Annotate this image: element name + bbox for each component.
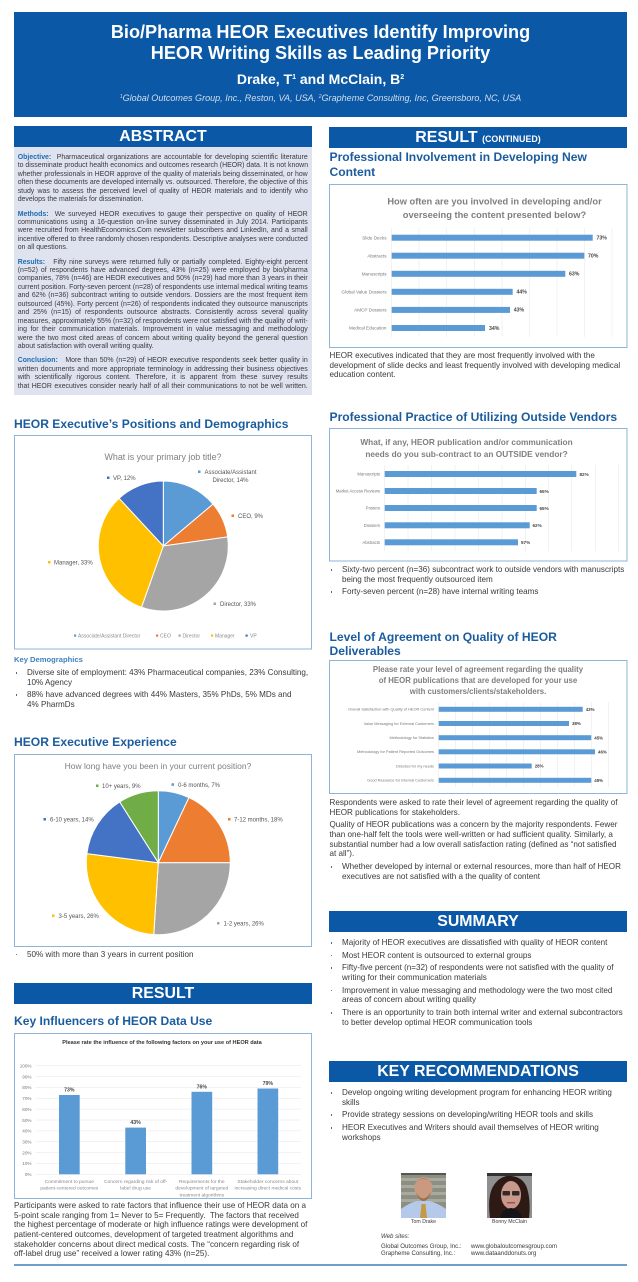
chart: agreement bars: Good Resource for Internal Customers — [367, 778, 434, 783]
chart: agreement bars: 38% — [572, 721, 581, 726]
chart: involvement bars: 73% — [596, 236, 607, 242]
text: influencers description: off-label drug use” received a lower rating 43% (n=25). — [14, 1249, 209, 1258]
panel: abstract text: develops the materials for dissemination. — [18, 196, 143, 203]
heading: summary — [329, 910, 627, 932]
panel: abstract text: outsourced (45%). Forty percent (n=26) of respondents indicated they outsource manuscripts — [18, 301, 308, 308]
panel: abstract text: Objective: Pharmaceutical organizations are accountable for developing scientific literature — [18, 154, 308, 161]
chart: influence column chart: 0% — [25, 1172, 32, 1177]
text: involvement description: education content. — [330, 370, 396, 379]
chart: experience pie — [14, 754, 312, 947]
text: influencers description: patient-centered outcomes, development of targeted treatment algorithms and — [14, 1230, 293, 1239]
chart: job title pie: Associate/Assistant — [204, 470, 257, 476]
list: summary points — [331, 938, 623, 1027]
chart: involvement bars: Manuscripts — [362, 272, 387, 276]
chart: involvement bars: 63% — [569, 272, 580, 278]
header banner — [14, 12, 627, 116]
chart: involvement bars: AMCP Dossiers — [354, 308, 387, 313]
text: influencers description: stakeholder concerns about direct medical costs. The “concern regarding risk of — [14, 1240, 299, 1249]
list: summary points: writing for their communication materials — [342, 973, 487, 982]
chart: agreement bars: of HEOR publications that are developed for your use — [379, 676, 578, 685]
panel: abstract text: communications using a 16-question on-line survey disseminated in July 2014. Participants — [18, 219, 308, 226]
panel: abstract text: Methods: We surveyed HEOR executives to gauge their perspective on quality of HEOR — [18, 211, 308, 218]
chart: vendor bars: 57% — [521, 540, 530, 545]
heading: result continued: RESULT (CONTINUED) — [415, 128, 541, 146]
heading: key influencers: Key Influencers of HEOR Data Use — [14, 1014, 212, 1028]
caption: Bonny McClain: Bonny McClain — [492, 1218, 527, 1224]
chart: experience pie: 10+ years, 9% — [102, 784, 141, 790]
chart: experience pie: 6-10 years, 14% — [50, 818, 94, 824]
chart: agreement bars: Methodology for Statistics — [389, 735, 434, 740]
heading: summary: SUMMARY — [437, 912, 519, 930]
list: key demographics: 10% Agency — [27, 678, 72, 687]
title: Bio/Pharma HEOR Executives Identify Improving — [111, 22, 530, 42]
panel: abstract text: that HEOR executives consider nearly half of all their communications to not be well written. — [18, 383, 308, 390]
text: involvement description — [330, 351, 620, 379]
photo: Tom Drake — [401, 1173, 446, 1218]
chart: agreement bars: Please rate your level of agreement regarding the quality — [373, 665, 584, 674]
text: influencers description — [14, 1201, 308, 1258]
text: agreement description: Whether developed by internal or external resources, more than half of HEOR — [342, 862, 621, 871]
list: vendor findings: Forty-seven percent (n=28) have internal writing teams — [342, 587, 538, 596]
list: vendor findings: being the most frequently outsourced item — [342, 575, 493, 584]
chart: influence column chart: Please rate the influence of the following factors on your use of HEOR data — [62, 1040, 263, 1046]
text: involvement description: development of slide decks and least frequently involved with developing medical — [330, 361, 620, 370]
chart: vendor bars: 65% — [540, 489, 549, 494]
text: web sites: Web sites: — [381, 1232, 409, 1240]
chart: involvement bars: 70% — [588, 254, 599, 260]
list: key demographics — [16, 668, 308, 709]
chart: job title pie: Manager, 33% — [54, 560, 93, 566]
chart: influence column chart: 30% — [22, 1140, 32, 1144]
chart: vendor bars: 62% — [532, 523, 542, 528]
text: agreement description: substantial number had a low overall satisfaction rating (defined as “not satisfied — [330, 840, 617, 849]
chart: experience pie: 7-12 months, 18% — [234, 818, 283, 824]
heading: professional involvement: Content — [330, 165, 375, 179]
chart: influence column chart: increasing direct medical costs — [234, 1186, 302, 1192]
list: recommendations: workshops — [342, 1133, 381, 1142]
text: web sites: Global Outcomes Group, Inc.: — [381, 1243, 462, 1250]
panel: abstract text: on all questions. — [18, 244, 68, 251]
list: key demographics: 4% PharmDs — [27, 700, 75, 709]
chart: agreement bars: Methodology for Patient Reported Outcomes — [357, 749, 434, 754]
chart: influence column chart: Concern regarding risk of off- — [104, 1179, 168, 1185]
chart: agreement bars: 46% — [598, 750, 607, 754]
panel: abstract text: written documents and more appropriate terminology in addressing their business objectives — [18, 366, 308, 373]
list: recommendations: Provide strategy sessions on developing/writing HEOR tools and skills — [342, 1110, 593, 1119]
chart: influence column chart: 90% — [22, 1074, 32, 1079]
chart: agreement bars: Directed for my needs — [396, 763, 434, 768]
chart: influence column chart: 10% — [22, 1161, 32, 1166]
chart: agreement bars: 43% — [586, 707, 595, 712]
chart: agreement bars: Value Messaging for External Customers — [364, 721, 434, 726]
heading: result — [14, 982, 312, 1004]
chart: influence column chart: Commitment to pursue — [45, 1179, 94, 1185]
panel: abstract text: were the two most cited areas of concern about writing quality beyond the general question — [18, 335, 308, 342]
chart: agreement bars: 28% — [535, 764, 544, 769]
chart: vendor bars — [329, 428, 628, 562]
chart: vendor bars: 82% — [580, 472, 589, 477]
list: summary points: to better develop optimal HEOR communication tools — [342, 1018, 532, 1027]
list: key demographics: 88% have advanced degrees with 44% Masters, 35% PhDs, 5% MDs and — [27, 690, 292, 699]
panel: abstract text: Results: Fifty nine surveys were returned fully or partially completed. Eighty-eight percent — [18, 259, 308, 266]
text: agreement description — [330, 798, 621, 881]
text: influencers description: Participants were asked to rate factors that influence their use of HEOR data on a — [14, 1201, 306, 1210]
panel: abstract text: and 62% (n=36) subcontract writing to outside vendors. Dossiers are the most frequent item — [18, 292, 308, 299]
list: summary points: Most HEOR content is outsourced to external groups — [342, 951, 531, 960]
panel: abstract text: measures, approximately 55% (n=32) of respondents were not satisfied with the quality of writ- — [18, 318, 308, 325]
heading: abstract — [14, 126, 312, 147]
chart: vendor bars: 65% — [540, 506, 549, 511]
chart: job title pie: Director, 33% — [220, 602, 257, 608]
chart: influence column chart: treatment algorithms — [180, 1192, 225, 1198]
text: agreement description: HEOR publications for stakeholders. — [330, 808, 460, 817]
heading: level of agreement: Level of Agreement on Quality of HEOR — [330, 630, 557, 644]
list: recommendations: Develop ongoing writing development program for enhancing HEOR writing — [342, 1088, 612, 1097]
heading: level of agreement: Deliverables — [330, 644, 401, 658]
chart: influence column chart: patient-centered outcomes — [40, 1186, 99, 1192]
chart: agreement bars: Overall Satisfaction with Quality of HEOR Content — [348, 707, 435, 712]
chart: involvement bars: Global Value Dossiers — [341, 290, 387, 294]
chart: vendor bars: Manuscripts — [357, 472, 380, 476]
chart: influence column chart: 40% — [22, 1129, 32, 1134]
panel: abstract text: ing for their communication materials. Improvement in value messaging and methodology — [18, 326, 308, 333]
list: experience note: 50% with more than 3 years in current position — [27, 950, 193, 958]
text: influencers description: the highest percentage of moderate or high influence ratings were development of — [14, 1220, 307, 1229]
chart: involvement bars: How often are you involved in developing and/or — [387, 196, 602, 206]
chart: influence column chart — [14, 1033, 312, 1199]
chart: experience pie: 3-5 years, 26% — [58, 914, 100, 920]
panel: abstract text: (n=52) of respondents have advanced degrees, 43% (n=25) were employed by bio/pharma — [18, 267, 308, 274]
heading: outside vendors: Professional Practice of Utilizing Outside Vendors — [330, 410, 617, 424]
text: agreement description: at all”). — [330, 849, 354, 858]
chart: influence column chart: 70% — [22, 1096, 32, 1101]
text: agreement description: executives are not satisfied with a the quality of content — [342, 872, 540, 881]
chart: job title pie: VP — [250, 634, 257, 640]
heading: executive experience: HEOR Executive Experience — [14, 735, 177, 749]
chart: influence column chart: 73% — [64, 1088, 75, 1094]
list: recommendations — [331, 1088, 612, 1142]
chart: involvement bars: overseeing the content presented below? — [403, 210, 587, 220]
chart: influence column chart: 100% — [20, 1064, 32, 1068]
text: web sites — [381, 1232, 557, 1257]
chart: influence column chart: 76% — [197, 1084, 207, 1090]
chart: influence column chart: 43% — [130, 1120, 141, 1126]
chart: vendor bars: Posters — [366, 506, 380, 510]
text: agreement description: Respondents were asked to rate their level of agreement regarding the quality of — [330, 798, 617, 807]
list: vendor findings: Sixty-two percent (n=36) subcontract work to outside vendors with manuscripts — [342, 565, 624, 574]
heading: result: RESULT — [132, 984, 194, 1002]
chart: involvement bars: 34% — [489, 326, 500, 332]
panel: abstract text — [14, 147, 312, 395]
title — [111, 22, 530, 63]
chart: job title pie: CEO, 9% — [238, 514, 264, 520]
panel: abstract text: study was to assess the perceived level of quality of HEOR materials and to identify who — [18, 188, 308, 195]
heading: positions and demographics: HEOR Executive’s Positions and Demographics — [14, 416, 288, 430]
chart: influence column chart: 79% — [263, 1081, 273, 1087]
heading: key recommendations — [329, 1061, 627, 1082]
affiliations: 1Global Outcomes Group, Inc., Reston, VA, USA, 2Grapheme Consulting, Inc, Greensboro, NC, USA — [120, 93, 521, 103]
chart: vendor bars: needs do you sub-contract to an OUTSIDE vendor? — [365, 449, 568, 459]
heading: level of agreement — [330, 630, 557, 658]
chart: influence column chart: 80% — [22, 1085, 32, 1090]
chart: involvement bars: Slide Decks — [362, 235, 387, 240]
list: summary points: areas of concern about writing quality — [342, 995, 476, 1004]
chart: job title pie: Manager — [215, 634, 235, 640]
panel: abstract text: companies, 78% (n=46) are HEOR executives and 50% (n=29) had more than 3 years in their — [18, 275, 308, 282]
list: recommendations: skills — [342, 1098, 360, 1107]
chart: involvement bars: 44% — [516, 290, 527, 296]
chart: influence column chart: Requirements for the — [179, 1179, 225, 1185]
chart: vendor bars: Market Access Reviews — [336, 488, 380, 494]
text: involvement description: HEOR executives indicated that they are most frequently involved with the — [330, 351, 595, 360]
panel: abstract text: Conclusion: More than 50% (n=29) of HEOR executive respondents seek better quality in — [18, 357, 308, 364]
heading: professional involvement — [330, 150, 587, 179]
chart: influence column chart: 20% — [22, 1150, 32, 1155]
text: web sites: Grapheme Consulting, Inc.: — [381, 1250, 455, 1257]
chart: involvement bars: Medical Education — [349, 326, 387, 331]
panel: abstract text: current position. Forty-seven percent (n=28) of respondents use internal medical writing teams — [18, 284, 308, 291]
chart: vendor bars: Abstracts — [363, 540, 380, 545]
text: agreement description: Quality of HEOR publications was a concern by the majority respondents. Fewer — [330, 820, 617, 829]
heading: key demographics: Key Demographics — [14, 655, 83, 664]
text: web sites: www.globaloutcomesgroup.com — [471, 1243, 557, 1250]
panel: abstract text: to disseminate product health economics and outcomes research (HEOR) data. It is not known — [18, 162, 308, 169]
chart: experience pie: 0-6 months, 7% — [178, 783, 221, 789]
photo: Bonny McClain — [487, 1173, 532, 1218]
panel: abstract text: were recruited from HealthEconomics.Com newsletter subscribers and LinkedIn, and a small — [18, 227, 308, 234]
chart: vendor bars: Dossiers — [364, 523, 380, 528]
chart: involvement bars — [329, 184, 628, 348]
chart: experience pie: How long have you been in your current position? — [65, 761, 252, 771]
chart: job title pie — [14, 435, 312, 650]
heading: key recommendations: KEY RECOMMENDATIONS — [377, 1063, 579, 1080]
list: summary points: Improvement in value messaging and methodology were the two most cited — [342, 986, 612, 995]
panel: abstract text: whether professionals in HEOR approve of the quality of materials being disseminated, or how — [18, 171, 308, 178]
chart: job title pie: Director — [182, 634, 200, 640]
chart: agreement bars: 45% — [594, 778, 603, 783]
chart: agreement bars — [329, 660, 628, 794]
chart: job title pie: Associate/Assistant Director — [78, 634, 141, 640]
chart: agreement bars: 45% — [594, 735, 603, 740]
list: summary points: Majority of HEOR executives are dissatisfied with quality of HEOR content — [342, 938, 607, 947]
panel: abstract text: with scientifically rigorous content. Therefore, it is apparent from these survey results — [18, 374, 308, 381]
chart: influence column chart: 60% — [22, 1107, 32, 1112]
list: summary points: There is an opportunity to train both internal writer and external subcontractors — [342, 1008, 623, 1017]
panel: abstract text: often these documents are developed internally vs. outsourced. Therefore, the objective of this — [18, 179, 308, 186]
chart: influence column chart: Stakeholder concerns about — [237, 1179, 299, 1185]
list: vendor findings — [331, 565, 624, 596]
list: summary points: Fifty-five percent (n=32) of respondents were not satisfied with the quality of — [342, 963, 614, 972]
caption: Tom Drake: Tom Drake — [411, 1218, 436, 1224]
panel: abstract text: about satisfaction with overall writing quality. — [18, 343, 154, 350]
authors: Drake, T1 and McClain, B2 — [237, 71, 404, 87]
chart: influence column chart: label drug use — [120, 1186, 151, 1192]
text: web sites: www.dataanddonuts.org — [471, 1250, 536, 1257]
chart: job title pie: VP, 12% — [113, 476, 136, 482]
heading: abstract: ABSTRACT — [119, 128, 207, 145]
panel: abstract text: and 25% (n=15) of respondents outsource abstracts. Consistently across several quality — [18, 309, 308, 316]
title: HEOR Writing Skills as Leading Priority — [151, 43, 490, 63]
chart: involvement bars: 43% — [514, 308, 524, 314]
chart: job title pie: What is your primary job title? — [105, 452, 222, 462]
chart: experience pie: 1-2 years, 26% — [224, 922, 265, 928]
chart: job title pie: Director, 14% — [212, 478, 249, 484]
chart: vendor bars: What, if any, HEOR publication and/or communication — [360, 437, 573, 447]
heading: professional involvement: Professional Involvement in Developing New — [330, 150, 587, 164]
chart: agreement bars: with customers/clients/stakeholders. — [409, 687, 546, 696]
chart: influence column chart: development of targeted — [175, 1186, 228, 1192]
list: recommendations: HEOR Executives and Writers should avail themselves of HEOR writing — [342, 1123, 599, 1132]
chart: influence column chart: 50% — [22, 1118, 32, 1123]
text: agreement description: than one-half felt the tools were well-written or had sufficient quality. Similarly, a — [330, 830, 613, 839]
panel: abstract text: incentive offered to three randomly chosen respondents. Descriptive analyses were conducted — [18, 236, 308, 243]
text: influencers description: 5-point scale ranging from 1= Never to 5= Frequently. The factors that received — [14, 1211, 299, 1220]
chart: involvement bars: Abstracts — [367, 253, 387, 258]
chart: job title pie: CEO — [160, 634, 171, 640]
heading: result continued — [329, 126, 627, 148]
list: key demographics: Diverse site of employment: 43% Pharmaceutical companies, 23% Consulting, — [27, 668, 308, 677]
